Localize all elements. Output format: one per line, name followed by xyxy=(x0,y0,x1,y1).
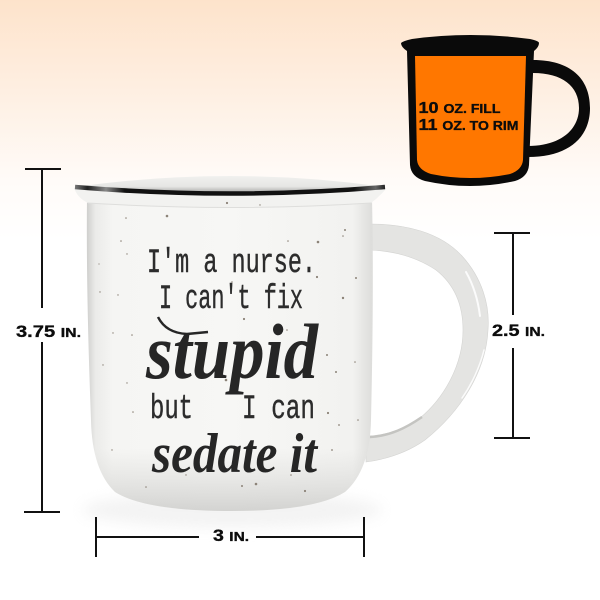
dimension: handle height 2.5 in.: 2.5 IN. xyxy=(492,322,545,340)
capacity text xyxy=(418,100,518,134)
line: I can: I can xyxy=(242,391,315,429)
mug body xyxy=(87,198,373,511)
mug rim xyxy=(75,186,385,208)
line: stupid: stupid xyxy=(145,308,319,395)
mug speckles xyxy=(98,202,359,492)
dimension: height 3.75 in.: 3.75 IN. xyxy=(16,323,81,341)
orange fill xyxy=(415,56,526,178)
capacity text: 11 OZ. TO RIM xyxy=(418,117,518,134)
dimension: width 3 in.: 3 IN. xyxy=(213,527,249,545)
soft shadow under mug xyxy=(82,492,382,528)
line: sedate it: sedate it xyxy=(151,423,318,485)
dimension: handle height 2.5 in. xyxy=(492,233,545,438)
photo: white speckled mug xyxy=(75,176,488,511)
mug handle xyxy=(366,224,488,462)
dimension: width 3 in. xyxy=(96,517,364,557)
dimension: height 3.75 in. xyxy=(16,169,81,512)
icon: small mug with fill capacity xyxy=(401,35,590,186)
line: I can't fix: I can't fix xyxy=(159,281,303,319)
line: but: but xyxy=(150,391,193,429)
mug slogan xyxy=(145,245,319,485)
capacity text: 10 OZ. FILL xyxy=(418,100,501,117)
line: I'm a nurse.: I'm a nurse. xyxy=(147,245,316,283)
